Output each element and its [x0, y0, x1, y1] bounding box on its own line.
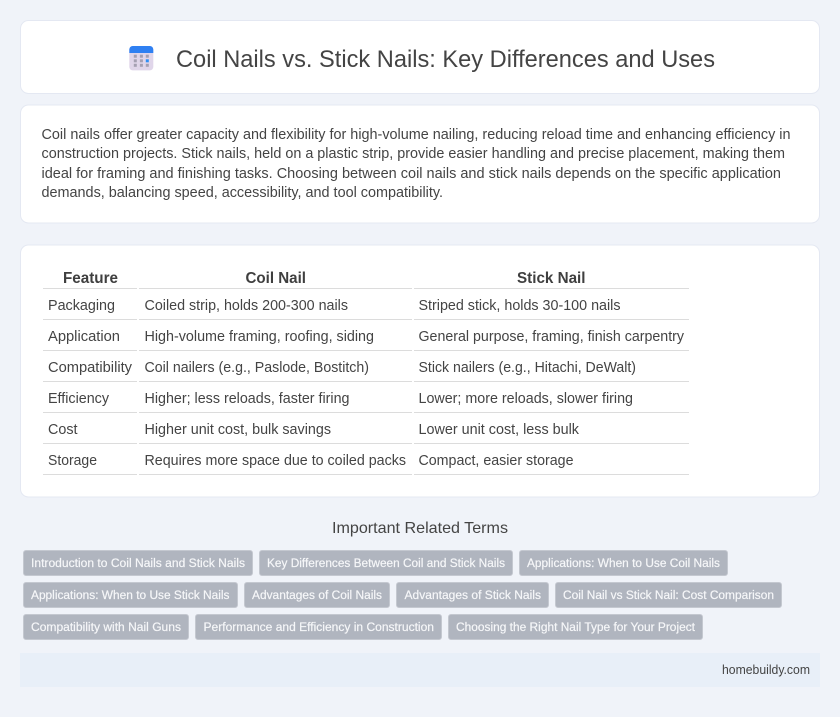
table row: efficiency: Lower; more reloads, slower firing: [418, 391, 633, 407]
footer source text: homebuildy.com: [722, 663, 810, 677]
table row: cost: Lower unit cost, less bulk: [418, 422, 580, 438]
text block: introduction paragraph: construction projects. Stick nails, held on a plastic strip, provide easier handling and precise placement, making them: [42, 146, 785, 162]
tag: Choosing the Right Nail Type for Your Project: [456, 620, 696, 634]
table row: application: Application: [48, 329, 120, 345]
table row: packaging: Packaging: [48, 298, 115, 314]
tag: [24, 550, 252, 576]
tag: Applications: When to Use Stick Nails: [31, 588, 230, 602]
tag: [24, 614, 188, 640]
tag: Performance and Efficiency in Construction: [204, 620, 434, 634]
tag: Coil Nail vs Stick Nail: Cost Comparison: [563, 588, 774, 602]
tag: [24, 582, 238, 608]
tag: Applications: When to Use Coil Nails: [527, 556, 720, 570]
table row: packaging: Striped stick, holds 30-100 nails: [418, 298, 620, 314]
table row: packaging: [48, 298, 620, 314]
text block: introduction paragraph: [42, 127, 790, 201]
tag: [396, 582, 548, 608]
tag: [260, 550, 512, 576]
tag: [244, 582, 390, 608]
tag: [196, 614, 442, 640]
panel: header: [20, 20, 820, 94]
table row: cost: [48, 422, 580, 438]
tag: [448, 614, 702, 640]
text block: introduction paragraph: ideal for framing and finishing tasks. Choosing between coil nails and stick nails depends on the specific application: [42, 166, 781, 182]
table header: Feature: [63, 270, 118, 287]
tag: Advantages of Coil Nails: [252, 588, 382, 602]
table row: application: General purpose, framing, finish carpentry: [418, 329, 685, 345]
table row: efficiency: Higher; less reloads, faster firing: [144, 391, 350, 407]
table row: compatibility: Stick nailers (e.g., Hitachi, DeWalt): [418, 360, 636, 376]
table row: compatibility: [48, 360, 636, 376]
tag: [556, 582, 782, 608]
table row: storage: [48, 453, 574, 469]
panel: related term tags: [24, 550, 782, 640]
table header: Coil Nail: [246, 270, 306, 287]
title: Coil Nails vs. Stick Nails: Key Differences and Uses: [176, 46, 715, 73]
text block: introduction paragraph: demands, balancing speed, accessibility, and tool compatibility.: [42, 185, 443, 201]
tag: Compatibility with Nail Guns: [31, 620, 181, 634]
table row: storage: Storage: [48, 453, 97, 469]
table row: compatibility: Compatibility: [48, 360, 133, 376]
table row: application: High-volume framing, roofing, siding: [144, 329, 374, 345]
text block: introduction paragraph: Coil nails offer greater capacity and flexibility for high-volume nailing, reducing reload time and enhancing efficiency in: [42, 127, 790, 143]
table row: storage: Requires more space due to coiled packs: [144, 453, 406, 469]
tag: Introduction to Coil Nails and Stick Nails: [31, 556, 245, 570]
footer: [20, 653, 820, 687]
table row: compatibility: Coil nailers (e.g., Paslode, Bostitch): [144, 360, 369, 376]
tag: Advantages of Stick Nails: [404, 588, 541, 602]
panel: comparison table: [20, 245, 820, 497]
table header: [63, 270, 586, 287]
table row: cost: Higher unit cost, bulk savings: [144, 422, 331, 438]
tag: [520, 550, 728, 576]
panel: introduction: [20, 105, 820, 223]
table row: packaging: Coiled strip, holds 200-300 nails: [144, 298, 348, 314]
tag: Key Differences Between Coil and Stick Nails: [267, 556, 505, 570]
table row: efficiency: [48, 391, 633, 407]
table row: cost: Cost: [48, 422, 78, 438]
table row: efficiency: Efficiency: [48, 391, 110, 407]
table row: application: [48, 329, 685, 345]
heading: important related terms: Important Related Terms: [332, 520, 508, 537]
table header: Stick Nail: [517, 270, 586, 287]
table row: storage: Compact, easier storage: [418, 453, 574, 469]
icon: calendar: [129, 46, 153, 70]
